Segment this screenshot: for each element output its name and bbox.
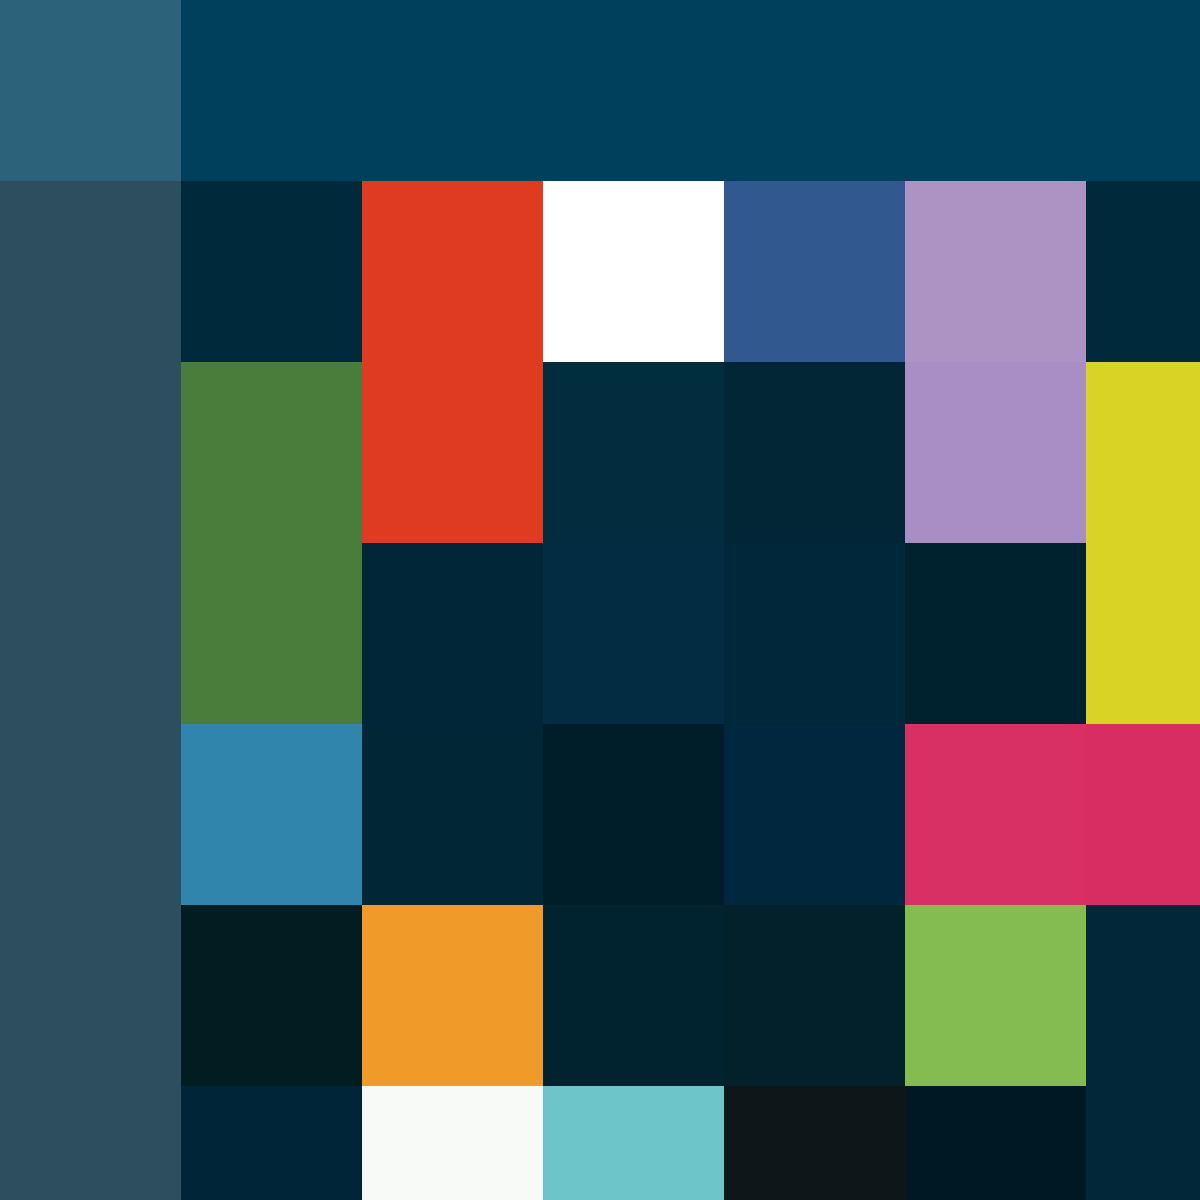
block: top-left teal [0, 0, 181, 181]
block: top banner row navy [181, 0, 1200, 181]
block: orange [362, 905, 543, 1086]
block: row 3 dark navy [724, 362, 905, 543]
block: blue [724, 181, 905, 362]
block: charcoal [724, 1086, 905, 1200]
block: row 5 navy [724, 724, 905, 905]
block: row 6 dark green-teal [724, 905, 905, 1086]
block: row 4 mid navy [543, 543, 724, 724]
block: right column lower navy [1086, 905, 1200, 1200]
block: yellow vertical [1086, 362, 1200, 724]
block: lavender upper [905, 181, 1086, 362]
block: left column slate [0, 181, 181, 1200]
block: row 4 deep navy [724, 543, 905, 724]
block: row 3 dark teal [543, 362, 724, 543]
block: white [543, 181, 724, 362]
block: ocean blue [181, 724, 362, 905]
block: row 6 near black [181, 905, 362, 1086]
block: off-white [362, 1086, 543, 1200]
block: red vertical [362, 181, 543, 543]
block: row 5 near black [543, 724, 724, 905]
block: lavender lower [905, 362, 1086, 543]
block: green vertical [181, 362, 362, 724]
block: row 4 dark navy [362, 543, 543, 724]
block: row 2 right dark navy [1086, 181, 1200, 362]
block: aqua [543, 1086, 724, 1200]
block: row 6 dark teal [543, 905, 724, 1086]
block: row 4 near black teal [905, 543, 1086, 724]
block: row 5 dark teal [362, 724, 543, 905]
block: row 2 dark navy [181, 181, 362, 362]
block: row 7 navy [181, 1086, 362, 1200]
block: lime green [905, 905, 1086, 1086]
block: magenta left [905, 724, 1086, 905]
block: magenta right [1086, 724, 1200, 905]
block: row 7 near black navy [905, 1086, 1086, 1200]
